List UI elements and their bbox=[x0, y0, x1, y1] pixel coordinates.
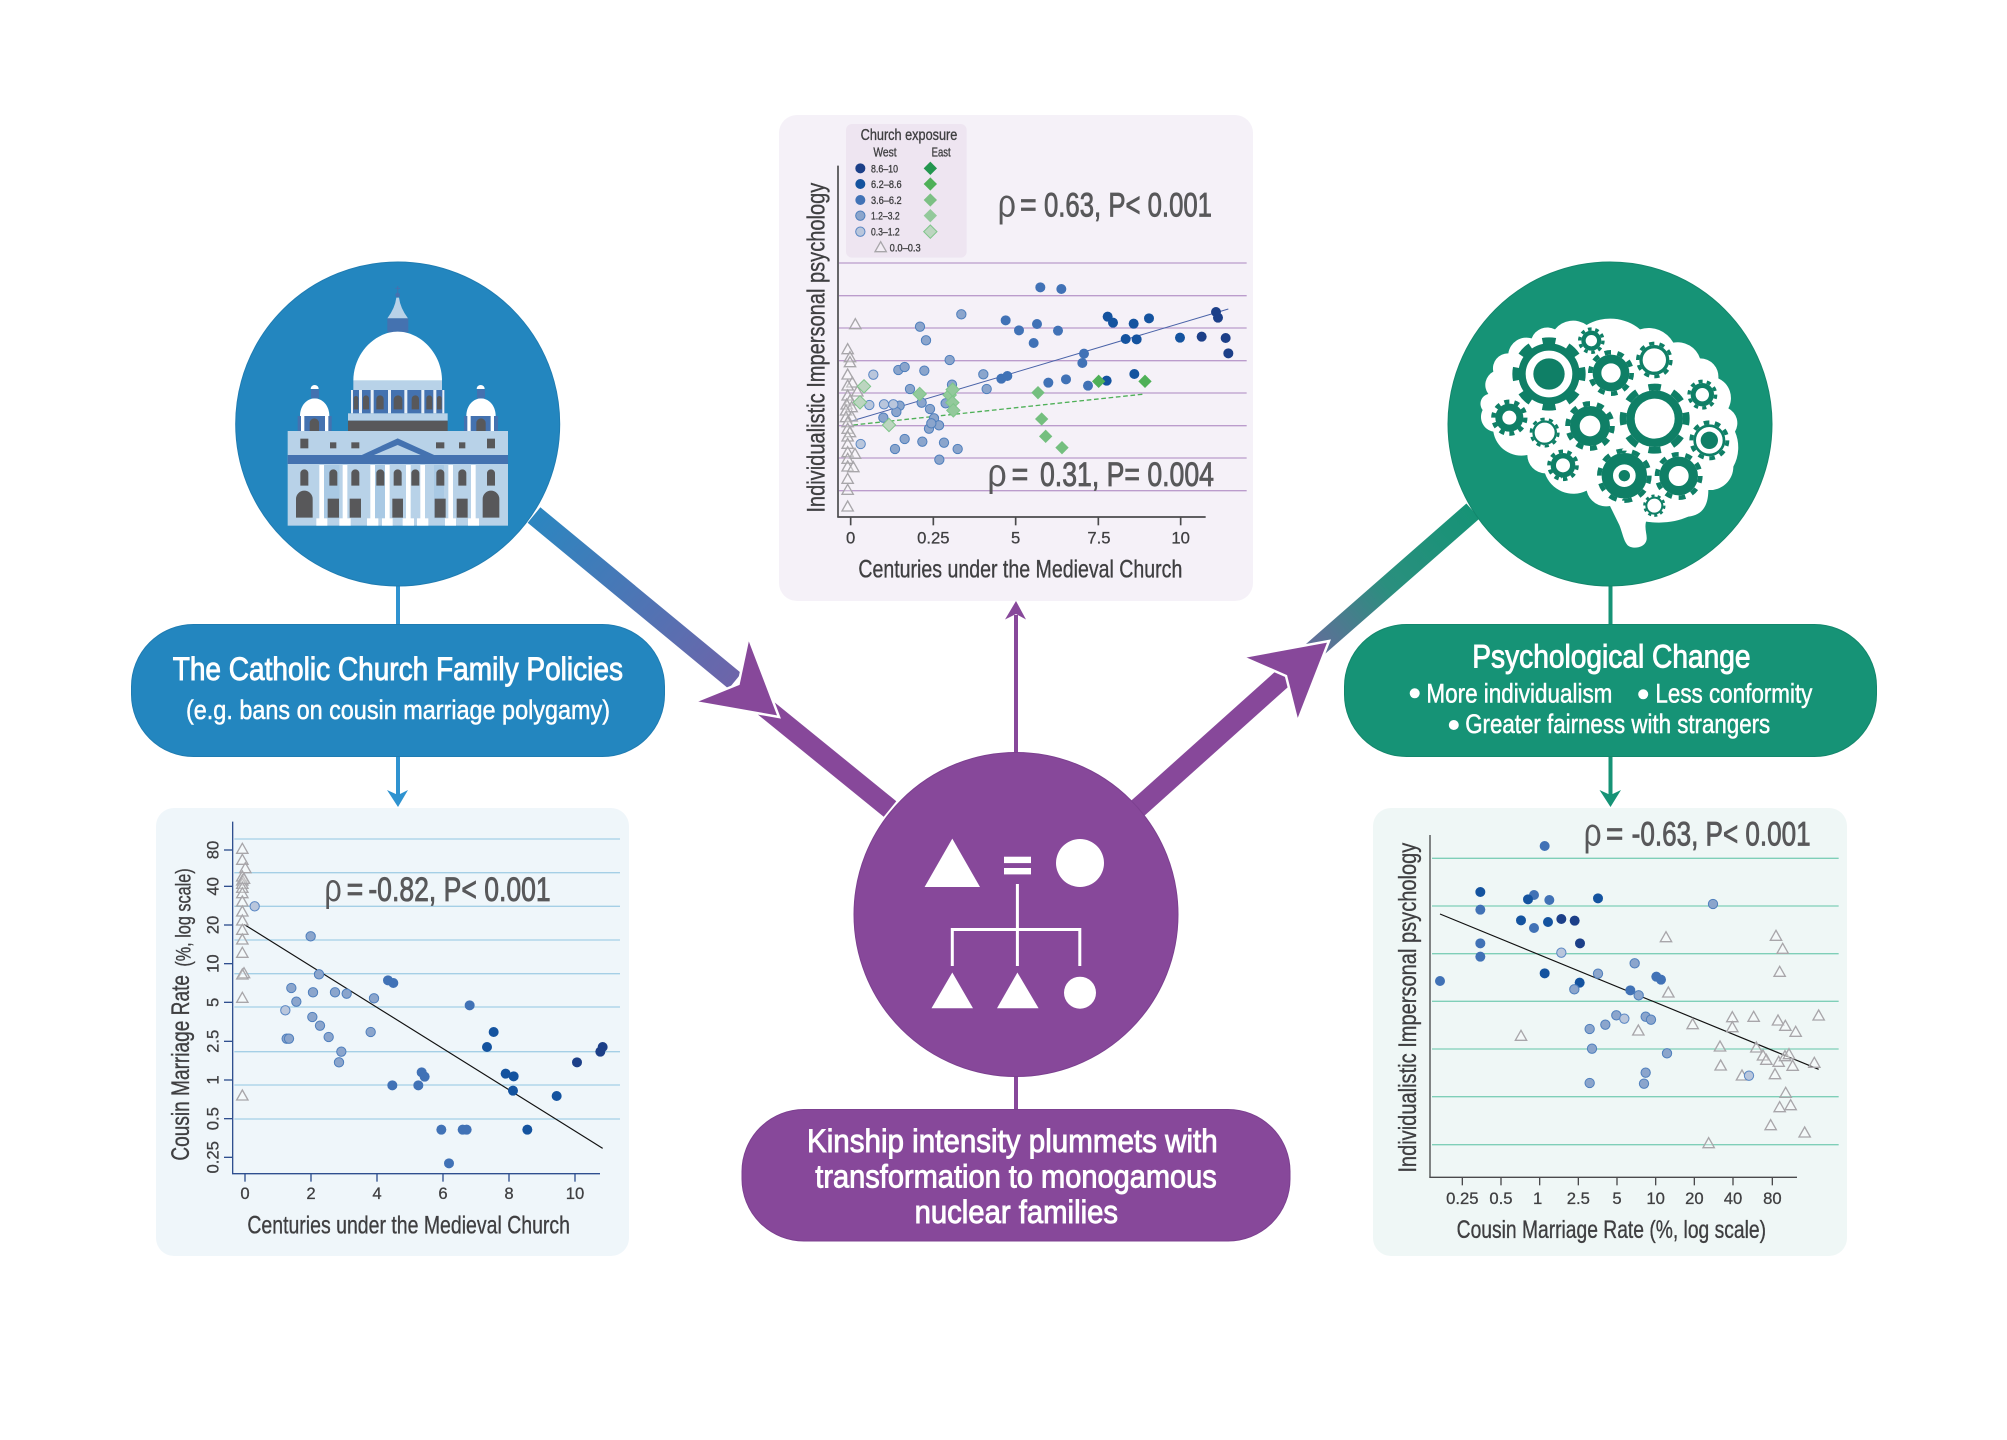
subheading: (e.g. bans on cousin marriage polygamy) bbox=[186, 695, 610, 725]
axes bbox=[837, 166, 1206, 525]
x axis ticks: 40 bbox=[1724, 1189, 1742, 1208]
panel: left chart bbox=[156, 808, 629, 1256]
legend: 6.2–8.6 bbox=[871, 179, 902, 191]
x axis ticks: 10 bbox=[566, 1184, 584, 1203]
circle: kinship family icon bbox=[854, 752, 1178, 1076]
connector and arrow: psychology bbox=[1600, 586, 1621, 807]
bullet list: More individualism bbox=[1426, 678, 1612, 708]
triangles: low exposure bbox=[237, 843, 251, 1100]
statement: Kinship intensity plummets with bbox=[807, 1123, 1218, 1159]
statistic: -0.63, P< 0.001 bbox=[1632, 816, 1811, 854]
panel: top chart bbox=[779, 115, 1253, 601]
y axis ticks bbox=[203, 841, 222, 1174]
legend: 1.2–3.2 bbox=[871, 211, 900, 223]
legend bbox=[846, 124, 967, 258]
regression line bbox=[1440, 914, 1819, 1069]
heading: Psychological Change bbox=[1472, 639, 1750, 675]
triangles: low exposure bbox=[1515, 930, 1824, 1148]
y axis title: Individualistic Impersonal psychology bbox=[802, 182, 830, 513]
facade bbox=[288, 431, 508, 526]
y axis title: Individualistic Impersonal psychology bbox=[1394, 842, 1422, 1173]
statistic: = bbox=[1606, 816, 1623, 854]
statistic: = bbox=[347, 871, 363, 909]
side tower left bbox=[298, 385, 332, 431]
statistic: east: = bbox=[1012, 456, 1028, 494]
axes bbox=[224, 822, 600, 1182]
bullet list bbox=[1410, 678, 1813, 739]
x axis ticks: 4 bbox=[372, 1184, 382, 1203]
x axis ticks: 6 bbox=[438, 1184, 448, 1203]
gears bbox=[1493, 329, 1727, 516]
y axis ticks: 40 bbox=[203, 877, 222, 896]
statistic: east: 0.31, P= 0.004 bbox=[1040, 456, 1214, 494]
statistic: ρ bbox=[1584, 811, 1602, 855]
west regression line bbox=[852, 309, 1228, 421]
axes bbox=[1429, 835, 1797, 1185]
x axis ticks bbox=[240, 1184, 584, 1203]
icon: cathedral bbox=[288, 286, 508, 526]
east regression line bbox=[853, 394, 1145, 425]
statistic: -0.82, P< 0.001 bbox=[368, 871, 551, 909]
arrow: church to kinship band bbox=[534, 515, 890, 809]
arrow: kinship to psychology band bbox=[1138, 511, 1473, 808]
statement: nuclear families bbox=[915, 1194, 1118, 1230]
x axis ticks: 0.25 bbox=[1446, 1189, 1479, 1208]
east points bbox=[853, 375, 1152, 454]
pill: kinship bbox=[742, 1110, 1290, 1241]
y axis ticks: 0.5 bbox=[203, 1107, 222, 1130]
legend: 3.6–6.2 bbox=[871, 195, 902, 207]
y axis ticks: 0.25 bbox=[203, 1141, 222, 1174]
chart: church exposure vs psychology bbox=[802, 124, 1247, 584]
y axis ticks: 10 bbox=[203, 954, 222, 973]
x axis ticks: 7.5 bbox=[1087, 528, 1111, 547]
x axis ticks: 20 bbox=[1685, 1189, 1704, 1208]
regression line bbox=[244, 924, 603, 1148]
x axis ticks: 2 bbox=[306, 1184, 316, 1203]
legend: 8.6–10 bbox=[871, 163, 898, 175]
statistic: west: ρ bbox=[998, 182, 1016, 226]
x axis ticks: 1 bbox=[1533, 1189, 1542, 1208]
circle: brain icon bbox=[1448, 262, 1772, 586]
legend: East bbox=[932, 146, 951, 160]
y axis ticks: 2.5 bbox=[203, 1030, 222, 1053]
x axis ticks: 0 bbox=[846, 528, 855, 547]
statement bbox=[807, 1123, 1218, 1230]
chart: church exposure vs cousin marriage bbox=[167, 822, 620, 1239]
x axis ticks: 10 bbox=[1171, 528, 1190, 547]
y axis title: Cousin Marriage Rate bbox=[167, 975, 195, 1161]
y axis ticks: 20 bbox=[203, 916, 222, 934]
pill: psychological change bbox=[1344, 624, 1876, 756]
statement: transformation to monogamous bbox=[815, 1158, 1217, 1194]
triangles: low exposure bbox=[840, 319, 863, 511]
x axis ticks: 2.5 bbox=[1567, 1189, 1590, 1208]
data points bbox=[250, 902, 608, 1168]
x axis ticks: 0 bbox=[240, 1184, 250, 1203]
side tower right bbox=[464, 385, 498, 431]
bullet list: Greater fairness with strangers bbox=[1465, 709, 1770, 739]
legend: Church exposure bbox=[861, 127, 957, 144]
x axis ticks: 80 bbox=[1763, 1189, 1782, 1208]
y axis ticks: 5 bbox=[203, 998, 222, 1007]
west points bbox=[856, 282, 1233, 464]
x axis ticks: 5 bbox=[1612, 1189, 1622, 1208]
connector and arrow: church bbox=[387, 586, 408, 807]
legend: 0.3–1.2 bbox=[871, 227, 900, 239]
x axis title: Centuries under the Medieval Church bbox=[247, 1211, 570, 1239]
x axis ticks: 0.5 bbox=[1489, 1189, 1513, 1208]
arrow: kinship up to top chart bbox=[1005, 601, 1026, 1111]
heading: The Catholic Church Family Policies bbox=[173, 651, 623, 687]
x axis ticks: 5 bbox=[1011, 528, 1020, 547]
x axis title: Cousin Marriage Rate (%, log scale) bbox=[1457, 1216, 1766, 1244]
x axis title: Centuries under the Medieval Church bbox=[858, 556, 1182, 584]
pill: church policies bbox=[132, 624, 664, 756]
y axis title: (%, log scale) bbox=[172, 868, 196, 967]
panel: right chart bbox=[1373, 808, 1847, 1256]
statistic bbox=[1584, 811, 1811, 855]
x axis ticks bbox=[1446, 1189, 1782, 1208]
y axis ticks: 1 bbox=[203, 1075, 222, 1085]
chart: cousin marriage vs psychology bbox=[1394, 811, 1839, 1244]
x axis ticks bbox=[846, 528, 1190, 547]
data points bbox=[1435, 841, 1754, 1088]
statistic: ρ bbox=[324, 866, 342, 910]
x axis ticks: 0.25 bbox=[917, 528, 950, 547]
icon: nuclear family tree bbox=[925, 839, 1104, 1009]
x axis ticks: 8 bbox=[504, 1184, 514, 1203]
statistic: east bbox=[987, 451, 1214, 495]
legend: 0.0–0.3 bbox=[890, 242, 921, 254]
bullet list: Less conformity bbox=[1655, 678, 1813, 708]
statistic: west bbox=[998, 182, 1212, 226]
legend: West bbox=[873, 146, 897, 160]
icon: brain with gears bbox=[1480, 319, 1738, 548]
x axis ticks: 10 bbox=[1646, 1189, 1665, 1208]
circle: church icon bbox=[236, 262, 560, 586]
statistic: west: 0.63, P< 0.001 bbox=[1044, 187, 1212, 225]
y axis ticks: 80 bbox=[203, 841, 222, 859]
statistic: east: ρ bbox=[987, 451, 1007, 495]
statistic: west: = bbox=[1020, 187, 1037, 225]
statistic bbox=[324, 866, 551, 910]
